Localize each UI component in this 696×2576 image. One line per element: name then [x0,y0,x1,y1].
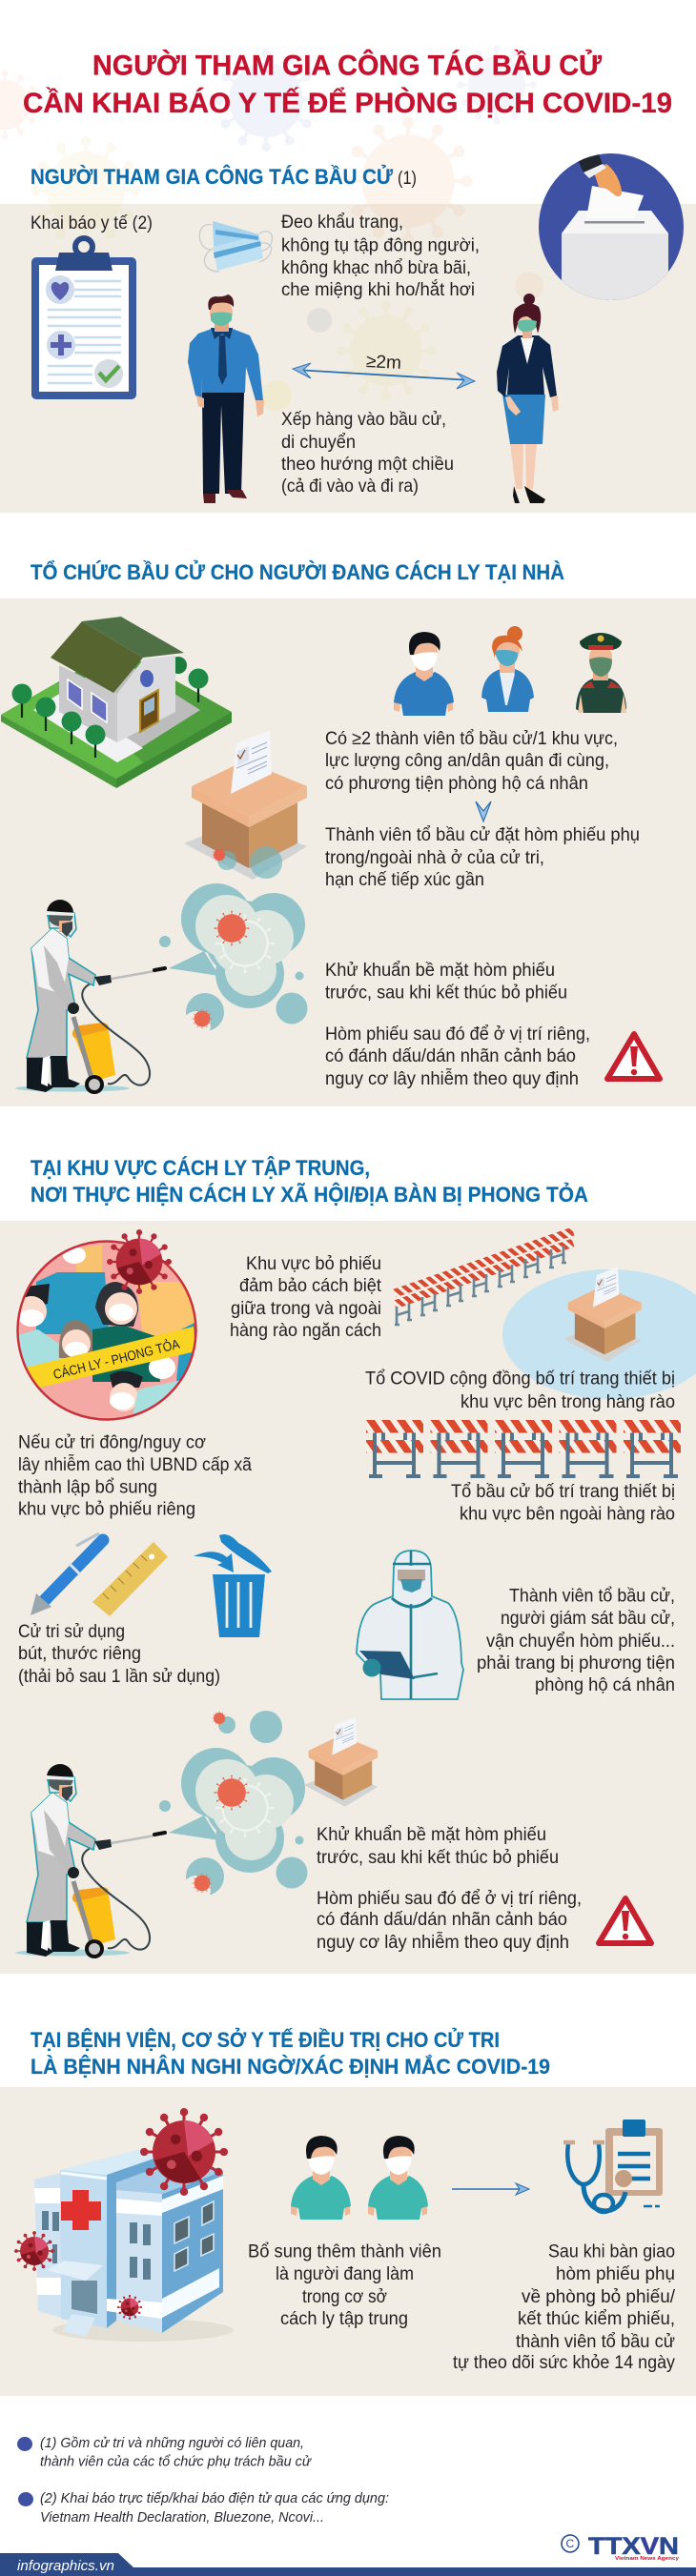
text: election team outside: khu vực bên ngoài hàng rào [460,1504,675,1525]
text: ballot box storage: nguy cơ lây nhiễm theo quy định [317,1932,569,1953]
text: medical declaration: Khai báo y tế (2) [31,213,153,233]
panel: home quarantine [0,598,696,1106]
text: auxiliary ballot box: hạn chế tiếp xúc gần [325,870,484,890]
title: CẦN KHAI BÁO Y TẾ ĐỂ PHÒNG DỊCH COVID-19 [23,87,672,119]
icon: man with mask [188,294,264,503]
text: protective equipment: phải trang bị phương tiện [477,1653,675,1673]
text: election team: có phương tiện phòng hộ cá nhân [325,774,588,794]
footer bar [0,2553,696,2576]
text: disinfect: Khử khuẩn bề mặt hòm phiếu [317,1825,546,1845]
icon: ballot box circle [534,151,686,305]
panel: concentrated quarantine [0,1221,696,1974]
text: disinfect: trước, sau khi kết thúc bỏ phiếu [317,1848,559,1868]
illustration: voting zone inside [502,1267,696,1399]
text: disinfect [325,961,567,1003]
heading: section 3: TẠI KHU VỰC CÁCH LY TẬP TRUNG, [31,1156,370,1180]
heading: section 1: (1) [398,169,417,189]
arrow: down [476,801,491,821]
illustration: worker in protective suit [357,1551,463,1699]
icon: election team members [394,626,626,716]
text: disinfect [317,1825,559,1868]
icon: woman with mask [497,294,559,503]
text: queueing guidance: (cả đi vào và đi ra) [281,477,419,497]
illustration: lockdown crowd [14,1232,200,1425]
text: extra polling area [18,1433,252,1519]
text: voter pens: bút, thước riêng [18,1644,141,1664]
text: mask guidance: che miệng khi ho/hắt hơi [281,279,475,300]
text: COVID team [365,1369,675,1412]
logo: TTXVN: Vietnam News Agency [615,2556,680,2562]
text: protective equipment: phòng hộ cá nhân [535,1675,675,1695]
icon: medical staff [291,2136,428,2220]
icon: warning triangle [607,1034,660,1079]
illustration: house [1,617,232,788]
text: polling area separation: hàng rào ngăn cách [230,1321,381,1341]
heading: section 3: NƠI THỰC HIỆN CÁCH LY XÃ HỘI/ĐỊA BÀN BỊ PHONG TỎA [31,1183,588,1207]
text: queueing guidance: theo hướng một chiều [281,455,454,475]
text: mask guidance [281,213,480,300]
text: queueing guidance: di chuyển [281,433,356,453]
arrow: 2 metre distance: ≥2m [365,352,401,374]
text: extra polling area: Nếu cử tri đông/nguy cơ [18,1433,206,1452]
text: self monitoring: Sau khi bàn giao [548,2241,675,2262]
footnote 2: Vietnam Health Declaration, Bluezone, Ncovi... [40,2510,324,2525]
text: protective equipment [477,1586,675,1695]
text: election team outside [451,1482,675,1525]
footnote 2: (2) Khai báo trực tiếp/khai báo điện tử qua các ứng dụng: [40,2491,389,2506]
text: disinfect: trước, sau khi kết thúc bỏ phiếu [325,984,567,1003]
text: ballot box storage [325,1024,590,1089]
text: protective equipment: người giám sát bầu cử, [501,1609,675,1629]
icon: man [394,632,454,716]
footer bar: infographics.vn [17,2558,114,2574]
icon: soldier [576,633,626,713]
text: mask guidance: Đeo khẩu trang, [281,213,403,233]
footnote 1 [17,2436,313,2470]
logo: TTXVN: TTX VN [588,2533,679,2560]
text: extra staff [248,2241,441,2329]
text: mask guidance: không tụ tập đông người, [281,236,480,255]
text: extra staff: Bổ sung thêm thành viên [248,2241,441,2262]
text: self monitoring: thành viên tổ bầu cử [516,2332,675,2352]
text: ballot box storage [317,1889,582,1953]
text: COVID team: Tổ COVID cộng đồng bố trí trang thiết bị [365,1369,675,1389]
footnote 1: thành viên của các tổ chức phụ trách bầu cử [40,2455,313,2470]
text: extra polling area: thành lập bổ sung [18,1477,157,1498]
text: lockdown band: CÁCH LY - PHONG TỎA [51,1335,181,1382]
footnote 1: (1) Gồm cử tri và những người có liên quan, [40,2436,304,2451]
icon: clipboard [31,238,136,399]
illustration: barrier row [366,1420,681,1476]
heading: section 4 [31,2028,550,2079]
text: auxiliary ballot box: trong/ngoài nhà ở của cử tri, [325,848,544,868]
text: disinfect: Khử khuẩn bề mặt hòm phiếu [325,961,555,981]
text: election team [325,729,618,794]
icon: trash can [194,1534,272,1637]
text: extra polling area: lây nhiễm cao thì UBND cấp xã [18,1454,252,1475]
text: voter pens: (thải bỏ sau 1 lần sử dụng) [18,1667,220,1687]
panel: participants [0,204,696,513]
icon: ballot box [184,730,307,880]
illustration: disinfecting ballot box [15,1711,378,1958]
icon: staff member one [291,2136,351,2220]
arrow: to monitoring [452,2183,529,2195]
text: election team outside: Tổ bầu cử bố trí trang thiết bị [451,1482,675,1502]
text: polling area separation: đảm bảo cách biệt [239,1276,382,1296]
text: polling area separation [230,1254,382,1341]
text: ballot box storage: Hòm phiếu sau đó để ở vị trí riêng, [325,1024,590,1045]
text: COVID team: khu vực bên trong hàng rào [461,1392,675,1412]
text: ballot box storage: Hòm phiếu sau đó để ở vị trí riêng, [317,1889,582,1909]
text: polling area separation: Khu vực bỏ phiếu [246,1254,381,1274]
logo: TTXVN [562,2533,680,2562]
text: election team: lực lượng công an/dân quân đi cùng, [325,751,609,771]
text: polling area separation: giữa trong và ngoài [231,1299,381,1319]
text: self monitoring: hòm phiếu phụ [556,2264,675,2284]
logo: TTXVN: C [566,2537,574,2550]
text: extra staff: trong cơ sở [302,2287,387,2307]
text: auxiliary ballot box: Thành viên tổ bầu cử đặt hòm phiếu phụ [325,825,640,845]
text: auxiliary ballot box [325,825,640,890]
icon: stethoscope and clipboard [563,2120,663,2212]
arrow: 2 metre distance [293,352,475,389]
text: self monitoring: tự theo dõi sức khỏe 14 ngày [453,2353,675,2373]
text: ballot box storage: nguy cơ lây nhiễm theo quy định [325,1068,579,1089]
illustration: disinfecting [15,883,307,1094]
icon: warning triangle [599,1898,651,1943]
text: queueing guidance: Xếp hàng vào bầu cử, [281,410,446,430]
text: protective equipment: vận chuyển hòm phiếu... [486,1632,675,1652]
text: extra polling area: khu vực bỏ phiếu riêng [18,1500,195,1519]
text: ballot box storage: có đánh dấu/dán nhãn cảnh báo [325,1046,576,1066]
text: extra staff: là người đang làm [276,2264,414,2284]
text: election team: Có ≥2 thành viên tổ bầu cử/1 khu vực, [325,729,618,749]
text: self monitoring [453,2241,676,2373]
text: voter pens [18,1622,220,1687]
icon: staff member two [368,2136,428,2220]
title [23,50,672,119]
heading: section 4: TẠI BỆNH VIỆN, CƠ SỞ Y TẾ ĐIỀU TRỊ CHO CỬ TRI [31,2028,500,2052]
heading: section 2: TỔ CHỨC BẦU CỬ CHO NGƯỜI ĐANG CÁCH LY TẠI NHÀ [31,560,564,584]
text: voter pens: Cử tri sử dụng [18,1622,125,1642]
text: self monitoring: kết thúc kiểm phiếu, [518,2309,675,2329]
text: self monitoring: về phòng bỏ phiếu/ [522,2287,676,2307]
icon: woman [481,626,534,712]
text: ballot box storage: có đánh dấu/dán nhãn cảnh báo [317,1910,567,1930]
icon: pen [31,1533,103,1615]
footnote 2 [18,2491,389,2525]
illustration: diagonal barrier [395,1231,573,1325]
icon: face masks [199,221,273,272]
title: NGƯỜI THAM GIA CÔNG TÁC BẦU CỬ [92,50,602,82]
text: protective equipment: Thành viên tổ bầu cử, [509,1586,675,1607]
panel: hospital [0,2087,696,2396]
text: mask guidance: không khạc nhổ bừa bãi, [281,258,471,278]
icon: ruler [92,1542,168,1616]
heading: section 3 [31,1156,588,1207]
heading: section 4: LÀ BỆNH NHÂN NGHI NGỜ/XÁC ĐỊNH MẮC COVID-19 [31,2055,550,2079]
illustration: hospital with virus [16,2112,234,2342]
heading: section 1: NGƯỜI THAM GIA CÔNG TÁC BẦU CỬ [31,165,394,189]
text: queueing guidance [281,410,454,497]
text: extra staff: cách ly tập trung [280,2309,408,2329]
